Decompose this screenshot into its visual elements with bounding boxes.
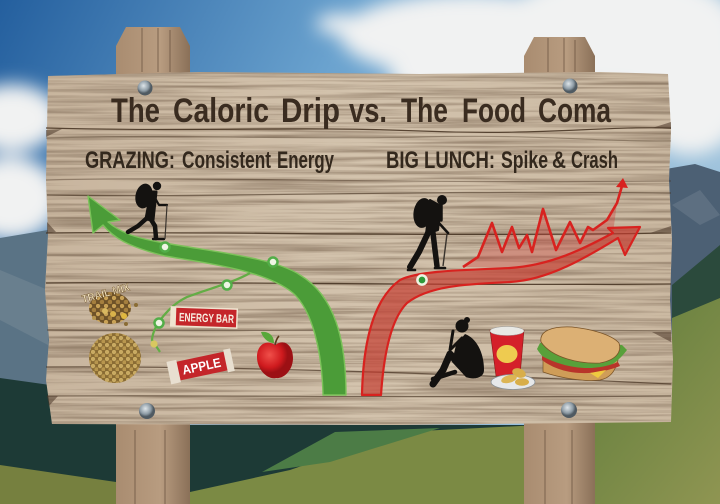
icon: slumped person (433, 317, 484, 384)
icon: plate of chips (491, 366, 535, 390)
label: energy bar: ENERGY BAR (179, 310, 234, 326)
heading: big lunch: Spike (501, 147, 548, 174)
heading: big lunch: & (552, 147, 566, 174)
icon: sandwich (537, 327, 627, 381)
heading: grazing (85, 147, 334, 174)
heading: big lunch: BIG LUNCH: (386, 147, 495, 174)
title: Caloric (173, 92, 269, 130)
heading: grazing: GRAZING: (85, 147, 175, 174)
arrow: red big lunch energy (362, 227, 640, 395)
title (111, 92, 612, 130)
heading: big lunch (386, 147, 618, 174)
icon: hiking pole (165, 205, 167, 239)
title: The (401, 92, 448, 130)
title: Food (462, 92, 526, 130)
title: vs. (349, 92, 387, 130)
background: forest and hills (0, 298, 720, 504)
title: The (111, 92, 160, 130)
icon: seed pile (89, 333, 141, 383)
label: apple bar: APPLE (181, 355, 222, 378)
icon: apple (257, 332, 293, 378)
label: apple bar (166, 348, 235, 384)
right post (524, 37, 595, 504)
icon: hiking pole tired (443, 234, 447, 266)
panel: wooden sign (45, 72, 673, 425)
icon: soda cup (490, 326, 524, 376)
arrow: green grazing energy (88, 196, 346, 395)
line: small energy branch (152, 273, 250, 352)
nails (138, 78, 578, 419)
group: trail mix (81, 281, 138, 326)
title: Drip (281, 92, 340, 130)
background: clouds (0, 0, 720, 240)
title: Coma (538, 92, 612, 130)
label: trail mix: TRAIL MIX (81, 281, 132, 306)
icon: hiker walking (128, 182, 167, 239)
label: energy bar (171, 307, 237, 328)
marker: red trail point (417, 275, 427, 285)
heading: big lunch: Crash (571, 147, 618, 174)
background: mountains (0, 164, 720, 400)
icon: tired hiker (408, 195, 448, 270)
markers: green trail points (154, 242, 278, 328)
heading: grazing: Energy (277, 147, 334, 174)
dot: yellow seed (150, 340, 158, 348)
heading: grazing: Consistent (182, 147, 271, 174)
post grain (135, 28, 575, 504)
left post (116, 27, 190, 504)
chart: red energy spikes (463, 178, 628, 268)
